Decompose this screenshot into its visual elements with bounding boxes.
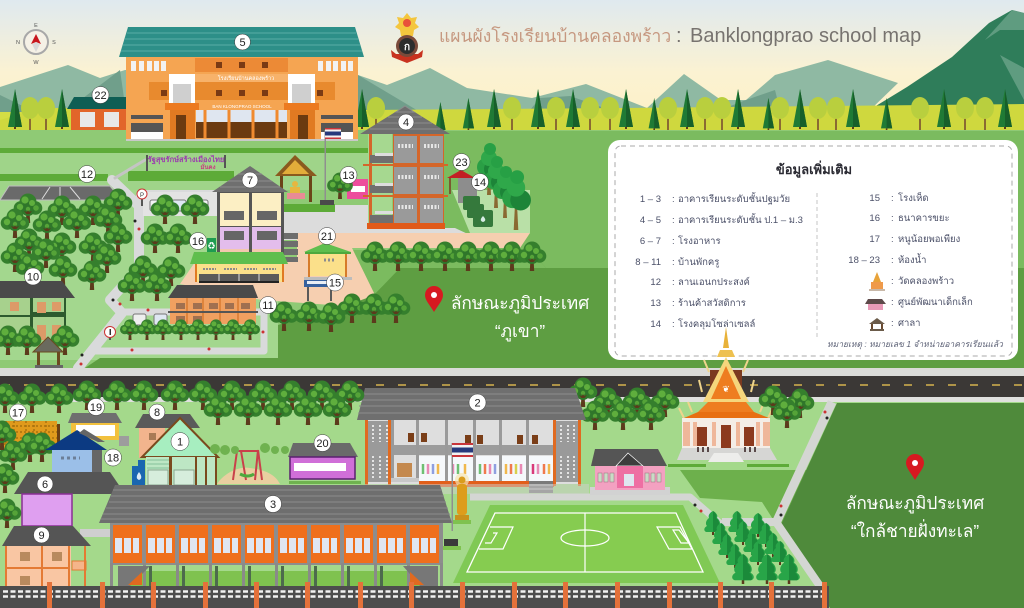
canteen building 7 xyxy=(212,166,298,262)
compass xyxy=(16,23,56,66)
restroom 19 xyxy=(68,413,129,446)
legend right column: 15 xyxy=(869,193,880,204)
number markers: 22 xyxy=(94,90,107,102)
legend left column: : xyxy=(672,215,675,226)
recycling bank 16 xyxy=(207,238,216,252)
icon: pavilion sala xyxy=(33,337,63,368)
number markers: 23 xyxy=(455,157,468,169)
number markers: 14 xyxy=(474,177,486,189)
legend right column: : xyxy=(891,297,894,308)
legend right column: หนูน้อยพอเพียง xyxy=(898,233,960,245)
number markers: 1 xyxy=(177,436,183,448)
number markers: 20 xyxy=(316,438,329,450)
legend right column: : xyxy=(891,276,894,287)
legend left column: 13 xyxy=(650,298,661,309)
trees near house 10 xyxy=(0,326,79,355)
access roads xyxy=(78,160,264,368)
teacher house 10 xyxy=(0,281,75,342)
conifer grove xyxy=(704,511,800,584)
legend right column: ห้องน้ำ xyxy=(898,253,926,266)
legend left column: อาคารเรียนระดับชั้น ป.1 – ม.3 xyxy=(678,213,803,226)
panel heading: ข้อมูลเพิ่มเติม xyxy=(776,160,852,178)
number markers: 11 xyxy=(262,300,274,312)
sky background xyxy=(0,0,1024,132)
legend left column: 14 xyxy=(650,319,661,330)
number markers: 9 xyxy=(38,530,45,542)
tree row front of plaza xyxy=(361,242,546,271)
number markers: 5 xyxy=(239,37,246,49)
number markers xyxy=(10,34,488,543)
number markers: 16 xyxy=(192,236,204,248)
school sign xyxy=(146,154,226,171)
school main building 5: BAN KLONGPRAO SCHOOL xyxy=(212,104,272,109)
title: แผนผังโรงเรียนบ้านคลองพร้าว xyxy=(439,26,671,46)
restroom 18 xyxy=(45,429,107,472)
temple: ❦ xyxy=(722,384,730,394)
legend right column: : xyxy=(891,234,894,245)
horizon forest xyxy=(0,89,1024,134)
legend left column: : xyxy=(672,319,675,330)
school main building 5: โรงเรียนบ้านคลองพร้าว xyxy=(218,74,274,82)
south lawn xyxy=(0,397,1024,608)
compass: W xyxy=(33,60,39,66)
restroom 21 xyxy=(304,243,352,280)
solar shed 14 and water tanks xyxy=(463,143,531,230)
vegetable plots 17 xyxy=(0,421,60,448)
flag and pole xyxy=(324,128,341,200)
legend right column: : xyxy=(891,213,894,224)
playground swing xyxy=(217,450,280,484)
bushes behind playground xyxy=(210,443,289,455)
legend left column: อาคารเรียนระดับชั้นปฐมวัย xyxy=(678,192,790,205)
legend right column: โรงเห็ด xyxy=(898,191,929,204)
canteen 6 xyxy=(14,472,125,526)
temple xyxy=(668,327,789,467)
hedges xyxy=(0,148,370,181)
note: หมายเหตุ : หมายเลข 1 จำหน่ายอาคารเรียนแล้ว xyxy=(827,339,1004,350)
pin and label: coast: “ใกล้ชายฝั่งทะเล” xyxy=(851,519,979,541)
legend left column: บ้านพักครู xyxy=(678,257,719,268)
compass: S xyxy=(52,40,56,46)
pin and label: mountains: “ภูเขา” xyxy=(495,321,545,342)
shrine xyxy=(275,155,335,212)
restroom 23 xyxy=(447,170,477,203)
legend left column: : xyxy=(672,257,675,268)
building 2 xyxy=(357,388,589,494)
legend right column: : xyxy=(891,318,894,329)
classroom building 3 xyxy=(99,485,452,586)
legend right column: 18 – 23 xyxy=(848,255,880,266)
road direction arrows xyxy=(80,220,828,516)
pin and label: mountains: ลักษณะภูมิประเทศ xyxy=(451,293,589,314)
canteen extension xyxy=(190,252,288,283)
temple trees xyxy=(569,378,814,430)
grove center xyxy=(118,194,209,301)
welfare shop 13 xyxy=(327,172,371,199)
number markers: 10 xyxy=(27,272,39,284)
teacher house 8 xyxy=(135,414,200,458)
number markers: 17 xyxy=(12,408,24,420)
parked cars upper xyxy=(150,200,208,211)
pin and label: coast: ลักษณะภูมิประเทศ xyxy=(846,493,984,514)
legend left column: 12 xyxy=(650,277,661,288)
legend left column xyxy=(635,192,803,330)
school sign: มั่นคง xyxy=(200,162,216,171)
legend right column: 17 xyxy=(869,234,880,245)
legend left column: โรงคลุมโซล่าเซลล์ xyxy=(678,318,756,330)
legend left column: : xyxy=(672,298,675,309)
number markers: 6 xyxy=(42,479,48,491)
restroom building 22 xyxy=(67,97,126,130)
legend right column: : xyxy=(891,193,894,204)
legend right column: : xyxy=(891,255,894,266)
restroom 20 xyxy=(288,443,361,484)
legend left column: 4 – 5 xyxy=(640,215,661,226)
legend right column xyxy=(848,191,973,329)
national flag and buddha statue xyxy=(443,443,473,550)
school emblem: ก xyxy=(404,42,410,53)
building 4 xyxy=(360,106,450,229)
path behind xyxy=(80,529,110,537)
compass: E xyxy=(34,23,38,29)
number markers: 3 xyxy=(270,499,276,511)
legend left column: : xyxy=(672,236,675,247)
compass: N xyxy=(16,40,20,46)
tree row east of 11 xyxy=(270,294,410,332)
trees west edge xyxy=(0,420,56,528)
school emblem xyxy=(391,13,423,63)
main road xyxy=(0,368,1024,397)
number markers: 4 xyxy=(403,117,409,129)
childcare centre pink building xyxy=(590,449,670,495)
boundary fence xyxy=(0,582,829,608)
hedge trees near building 11 xyxy=(120,319,260,340)
legend left column: ร้านค้าสวัสดิการ xyxy=(678,298,746,309)
upper plazas xyxy=(143,190,530,306)
legend left column: 8 – 11 xyxy=(635,257,661,268)
parking lot xyxy=(0,186,122,200)
title: Banklongprao school map xyxy=(690,25,921,47)
icon: sala legend xyxy=(869,318,885,331)
legend right column: วัดคลองพร้าว xyxy=(898,276,954,287)
icon: temple legend xyxy=(869,272,885,291)
low ground south-east xyxy=(780,403,1024,608)
tree belt along road xyxy=(0,380,364,425)
water tank xyxy=(132,460,145,486)
kindergarten building 1 xyxy=(142,418,218,486)
pin and label: coast xyxy=(846,454,984,541)
legend left column: ลานเอนกประสงค์ xyxy=(678,276,750,288)
mushroom house 15 xyxy=(304,280,332,301)
parking sign: P xyxy=(140,193,144,199)
number markers: 8 xyxy=(154,407,160,419)
school main building 5 xyxy=(119,27,364,141)
recycling bank 16: ♻ xyxy=(208,242,215,250)
football field xyxy=(453,505,720,583)
ground lawn xyxy=(0,130,1024,370)
number markers: 12 xyxy=(81,169,93,181)
legend right column: ศูนย์พัฒนาเด็กเล็ก xyxy=(898,295,973,308)
info panel xyxy=(608,140,1018,360)
number markers: 2 xyxy=(474,398,481,410)
number markers: 18 xyxy=(107,452,119,464)
legend left column: โรงอาหาร xyxy=(678,235,721,247)
school sign: รัฐสุขรักษ์สร้างเมืองไทย xyxy=(148,154,224,165)
legend right column: ศาลา xyxy=(898,318,921,329)
parking sign xyxy=(137,189,147,206)
number markers: 21 xyxy=(321,231,333,243)
legend right column: ธนาคารขยะ xyxy=(898,213,950,224)
legend left column: 6 – 7 xyxy=(640,236,661,247)
legend left column: 1 – 3 xyxy=(640,194,661,205)
pin and label: mountains xyxy=(425,286,589,342)
legend left column: : xyxy=(672,277,675,288)
number markers: 15 xyxy=(329,278,341,290)
number markers: 19 xyxy=(90,402,102,414)
mountain range xyxy=(0,10,1024,112)
south roads xyxy=(470,402,832,592)
teacher house 9 xyxy=(2,526,91,586)
number markers: 7 xyxy=(247,175,253,187)
number markers: 13 xyxy=(342,170,355,182)
legend left column: : xyxy=(672,194,675,205)
one-way sign xyxy=(104,326,116,340)
teacher house 11 xyxy=(168,285,258,324)
grove west xyxy=(1,188,132,290)
title: : xyxy=(676,25,682,47)
icon: childcare legend xyxy=(865,299,886,310)
legend right column: 16 xyxy=(869,213,880,224)
parked cars lower xyxy=(133,314,167,325)
